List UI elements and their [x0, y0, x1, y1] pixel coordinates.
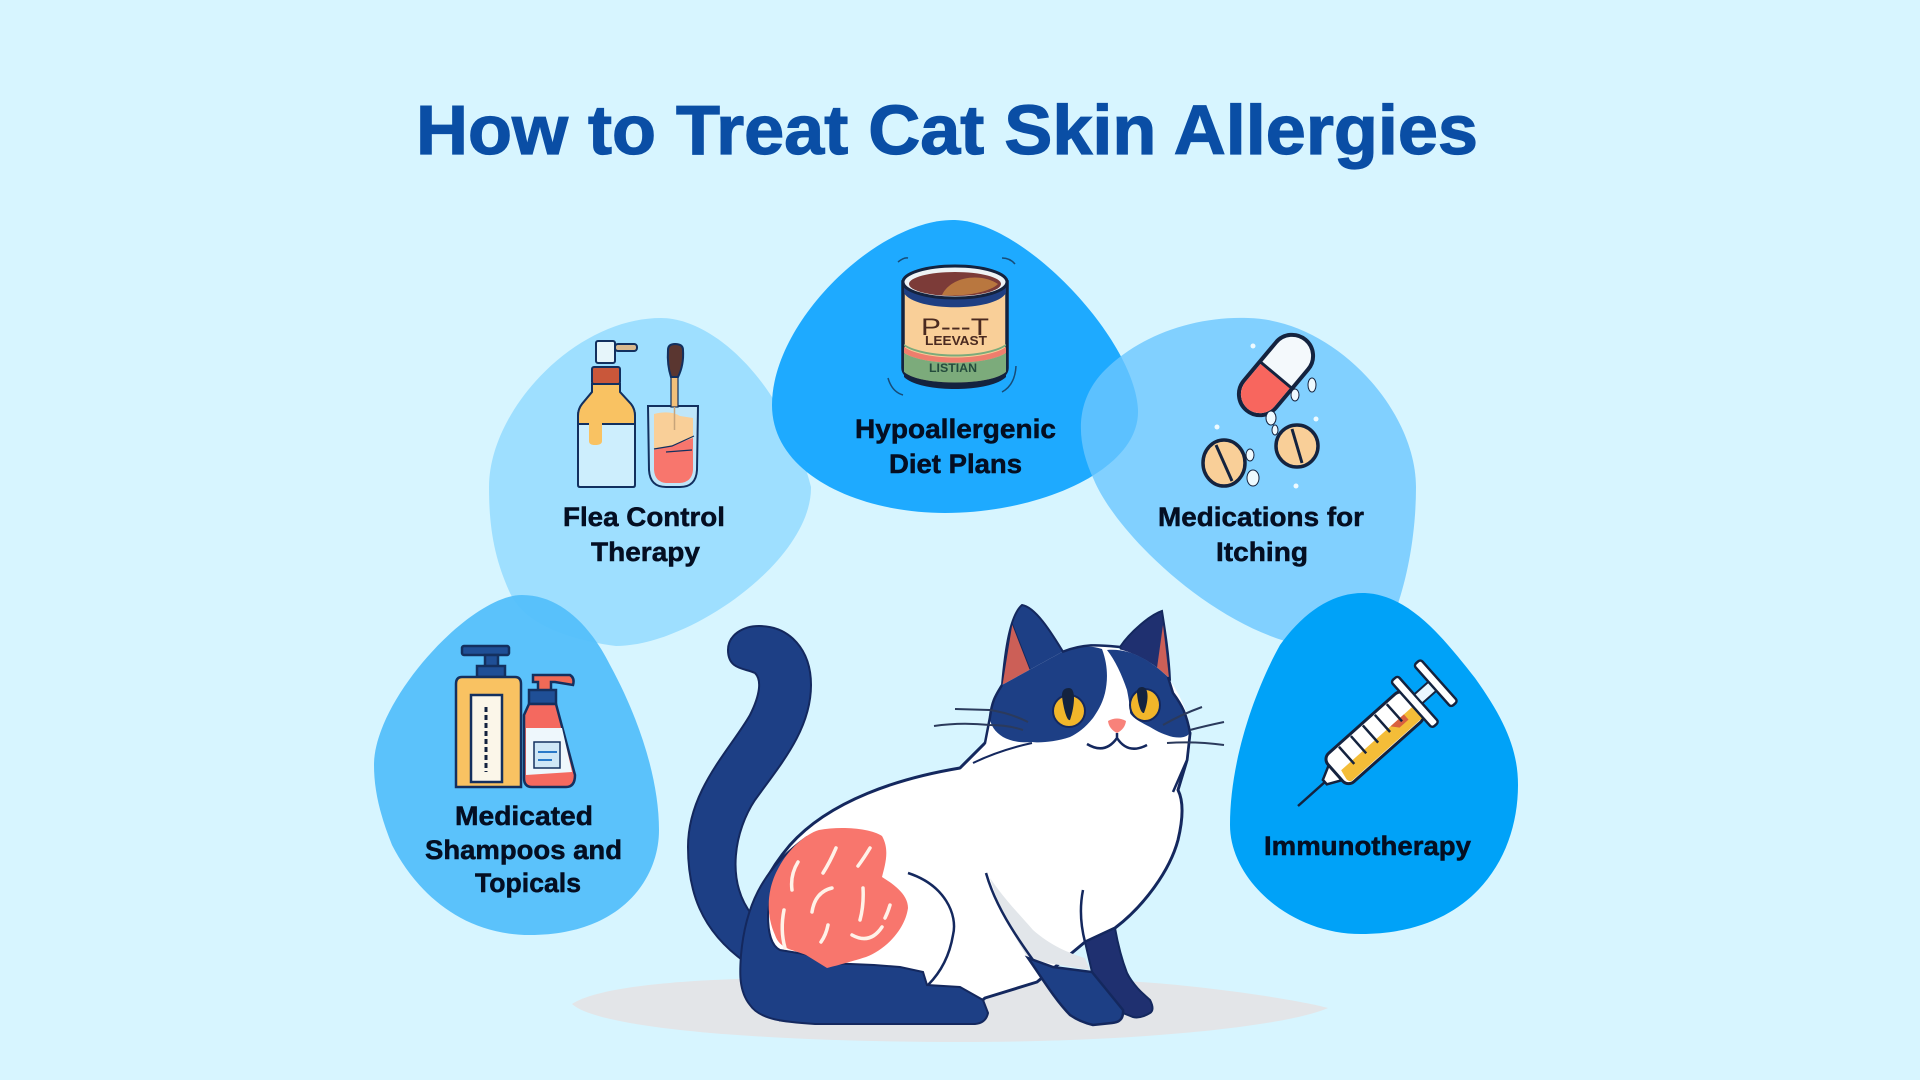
- cat rear navy fur: [740, 837, 988, 1024]
- haunch line: [908, 873, 954, 985]
- front paw: [1028, 958, 1123, 1025]
- eye right: [1130, 687, 1160, 721]
- title: How to Treat Cat Skin Allergies: [416, 91, 1478, 169]
- text: immunotherapy: Immunotherapy: [1264, 831, 1471, 861]
- cat nose: [1108, 718, 1126, 733]
- red irritated skin patch: [769, 828, 908, 968]
- panel: medicated shampoos and topicals: [374, 595, 659, 935]
- text: medicated shampoos and topicals: Medicated: [455, 801, 593, 831]
- cat mouth: [1087, 733, 1147, 749]
- eye left: [1053, 688, 1085, 727]
- icon: pet food can: [888, 258, 1016, 395]
- text: medications for itching: [1158, 502, 1364, 567]
- leg outlines: [986, 873, 1085, 960]
- back front leg: [1085, 928, 1152, 1018]
- illustration: cat: [688, 605, 1224, 1025]
- text: medicated shampoos and topicals: Topicals: [475, 868, 581, 898]
- cat left inner ear: [1002, 623, 1033, 685]
- ground shadow: [572, 978, 1328, 1042]
- patch fur marks: [782, 848, 890, 948]
- head outline: [960, 645, 1190, 792]
- cat left ear: [1000, 605, 1065, 700]
- text: medicated shampoos and topicals: Shampoos and: [425, 835, 622, 865]
- whiskers: [934, 707, 1224, 745]
- panel: immunotherapy: [1230, 593, 1518, 934]
- text: flea control therapy: Therapy: [591, 537, 700, 567]
- navy head mask: [990, 647, 1190, 742]
- text: medications for itching: Medications for: [1158, 502, 1364, 532]
- neck line: [973, 743, 1032, 763]
- text: hypoallergenic diet plans: [855, 414, 1056, 479]
- cat head: [985, 646, 1190, 795]
- text: hypoallergenic diet plans: Diet Plans: [889, 449, 1022, 479]
- icon: pet food can: LISTIAN: [929, 361, 977, 375]
- text: flea control therapy: [563, 502, 725, 567]
- panel: flea control therapy: [489, 318, 811, 646]
- cat right inner ear: [1157, 625, 1169, 678]
- chest shadow: [990, 878, 1090, 970]
- panel: hypoallergenic diet plans: [772, 220, 1138, 513]
- icon: flea shampoo bottle and brush in glass: [578, 341, 698, 487]
- cat body: [745, 720, 1190, 1020]
- text: medicated shampoos and topicals: [425, 801, 622, 898]
- text: flea control therapy: Flea Control: [563, 502, 725, 532]
- cat right ear: [1120, 611, 1170, 690]
- cat tail: [688, 626, 811, 962]
- icon: pet food can: LEEVAST: [925, 333, 987, 348]
- text: medications for itching: Itching: [1216, 537, 1308, 567]
- panel: medications for itching: [1081, 318, 1416, 644]
- icon: capsule and tablets: [1203, 326, 1322, 488]
- icon: syringe: [1277, 657, 1460, 829]
- icon: pet food can: P---T: [921, 314, 989, 341]
- text: hypoallergenic diet plans: Hypoallergenic: [855, 414, 1056, 444]
- icon: shampoo bottles: [456, 646, 575, 787]
